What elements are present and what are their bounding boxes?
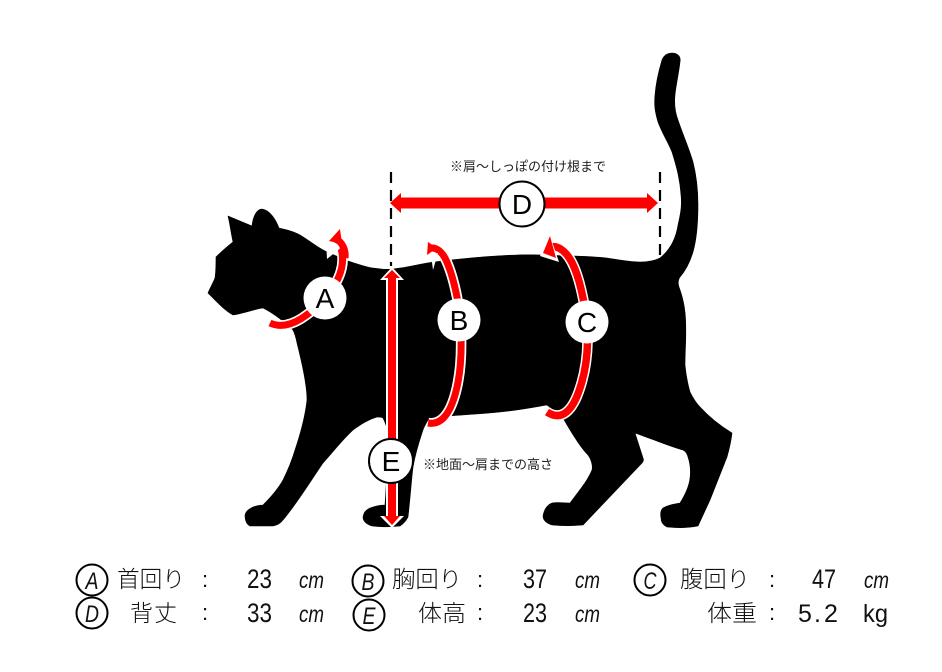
arrow D (390, 193, 658, 213)
arrow A: neck (270, 226, 345, 325)
legend E height: E (362, 603, 376, 630)
badge A: A (316, 283, 335, 314)
legend C belly: cm (864, 567, 889, 593)
cat silhouette (208, 53, 732, 528)
legend C belly: C (644, 568, 657, 595)
legend E height: 体高 (418, 594, 466, 628)
legend C belly: 腹回り (680, 560, 750, 594)
badge A (304, 276, 346, 320)
legend A neck (76, 560, 324, 596)
badge E: E (382, 446, 400, 477)
legend D back length: D (85, 601, 99, 628)
badge B (438, 298, 480, 342)
legend C belly (634, 560, 889, 596)
arrow B: chest (427, 242, 461, 423)
arrow C: belly (540, 233, 588, 416)
legend weight (707, 594, 888, 628)
legend E height: cm (575, 601, 600, 627)
badge C: C (577, 307, 597, 338)
legend E height: 23 (523, 598, 547, 628)
badge D: D (512, 189, 532, 220)
legend row 1 (76, 560, 889, 596)
legend A neck: 首回り (117, 560, 185, 594)
arrow E: height (380, 267, 404, 528)
legend B chest: 37 (523, 564, 547, 594)
legend weight: 体重 (707, 594, 757, 628)
caption: E measure note: ※地面〜肩までの高さ (423, 457, 553, 472)
legend B chest: 胸回り (392, 560, 462, 594)
legend E height (354, 594, 600, 630)
legend row 2 (76, 594, 888, 630)
legend weight: 5.2 (798, 600, 838, 628)
badge D (500, 182, 544, 226)
legend C belly: 47 (812, 564, 836, 594)
dashed guide lines (391, 172, 660, 266)
legend B chest: cm (575, 567, 600, 593)
legend D back length: : (202, 600, 208, 625)
badge C (566, 300, 608, 344)
legend C belly: : (769, 567, 775, 592)
legend E height: : (477, 600, 483, 625)
legend A neck: cm (299, 567, 324, 593)
legend A neck: : (202, 567, 208, 592)
legend B chest: B (362, 569, 374, 596)
legend weight: kg (863, 600, 888, 628)
legend weight: : (769, 600, 775, 625)
legend D back length: cm (299, 601, 324, 627)
caption: D measure note: ※肩〜しっぽの付け根まで (450, 159, 606, 174)
badge B: B (450, 305, 468, 336)
legend A neck: A (84, 568, 98, 595)
badge E (369, 439, 413, 483)
legend D back length: 背丈 (130, 594, 177, 628)
legend A neck: 23 (247, 564, 272, 594)
legend B chest (352, 560, 600, 596)
legend B chest: : (477, 567, 483, 592)
legend D back length: 33 (247, 598, 272, 628)
legend D back length (76, 594, 324, 628)
